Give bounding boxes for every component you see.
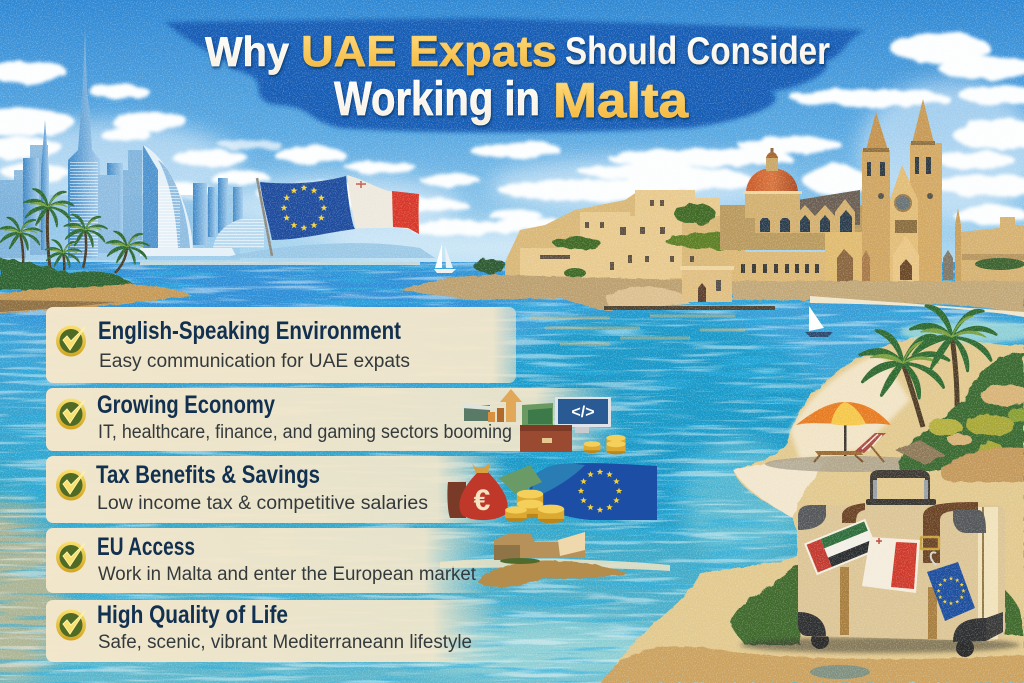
- panel: Tax Benefits and Savings: [46, 456, 657, 523]
- panel: Tax Benefits and Savings: Low income tax & competitive salaries: [97, 493, 428, 514]
- dome: [745, 192, 800, 218]
- icon: EU flag, money bag and coins: €: [474, 484, 491, 517]
- icon: EU flag, money bag and coins: [447, 463, 657, 523]
- panel: EU Access: [46, 528, 670, 593]
- panel: Growing Economy: Growing Economy: [97, 391, 275, 419]
- title: UAE Expats: [301, 27, 557, 76]
- title: Should Consider: [565, 30, 830, 73]
- panel: English-Speaking Environment: English-Speaking Environment: [98, 317, 402, 345]
- title: Working in: [334, 73, 540, 126]
- icon: economy growth chart, briefcase and monitor: </>: [571, 404, 595, 421]
- towers and facade: [825, 232, 862, 282]
- icon: check badge: [56, 542, 86, 572]
- panel: Growing Economy: [46, 388, 626, 454]
- suitcase: [730, 470, 1023, 657]
- shore rocks: [400, 275, 690, 310]
- panel: High Quality of Life: High Quality of Life: [97, 601, 288, 629]
- title: [205, 27, 830, 128]
- sea: [0, 258, 1024, 683]
- right buildings: [961, 217, 1024, 282]
- beach sand: [600, 337, 1024, 683]
- panel: Growing Economy: IT, healthcare, finance, and gaming sectors booming: [98, 422, 512, 443]
- luggage tag: EU: [927, 552, 975, 621]
- title banner: [165, 18, 865, 132]
- trees: [674, 204, 716, 224]
- lower wall: [728, 252, 826, 282]
- Dubai skyline: [0, 27, 435, 260]
- panel: Tax Benefits and Savings: Tax Benefits & Savings: [96, 461, 320, 489]
- terraced buildings: [505, 190, 745, 282]
- panel: English-Speaking Environment: Easy communication for UAE expats: [99, 351, 410, 372]
- panel: High Quality of Life: [46, 600, 501, 662]
- icon: check badge: [56, 610, 86, 640]
- right palms and bushes: [860, 306, 1024, 482]
- left island with palms: [0, 189, 193, 314]
- title: Malta: [553, 74, 689, 128]
- clouds: [0, 33, 1024, 236]
- harbour gatehouse: [682, 268, 732, 302]
- panel: High Quality of Life: Safe, scenic, vibrant Mediterraneann lifestyle: [98, 632, 472, 653]
- icon: Malta island with fort: [440, 532, 670, 587]
- sticker: Malta flag: [862, 537, 920, 593]
- sticker: UAE flag: [804, 519, 878, 575]
- panel: English-Speaking Environment: [46, 307, 516, 383]
- cloud haze: [0, 80, 1024, 263]
- panel: EU Access: Work in Malta and enter the European market: [98, 564, 477, 585]
- icon: check badge: [56, 470, 86, 500]
- sailboats: [434, 244, 833, 337]
- panel: EU Access: EU Access: [97, 533, 195, 561]
- Malta city and cathedral: [400, 99, 1024, 317]
- EU and Malta flags: [257, 175, 420, 256]
- beach umbrella and lounger: [796, 402, 891, 462]
- icon: check badge: [56, 326, 86, 356]
- icon: economy growth chart, briefcase and monitor: [462, 389, 626, 454]
- title: Why: [205, 28, 290, 75]
- sky background: [0, 0, 1024, 270]
- nave: [720, 205, 862, 250]
- icon: check badge: [56, 398, 86, 430]
